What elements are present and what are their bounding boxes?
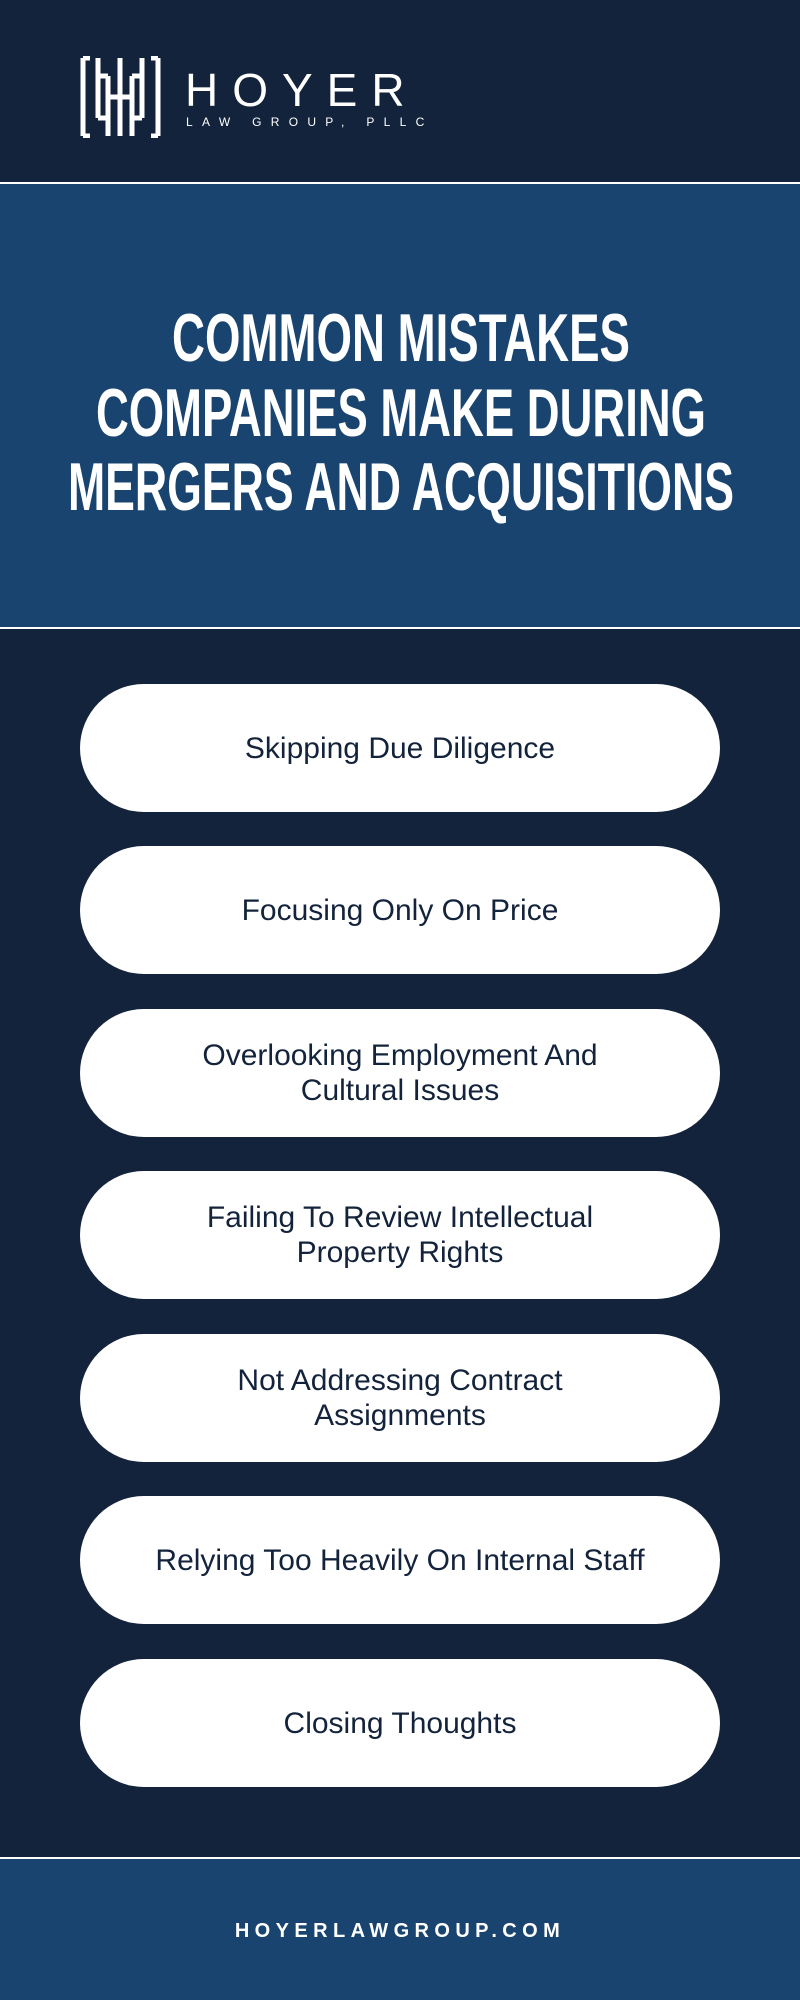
- header logo: [80, 56, 434, 138]
- item 6: [80, 1496, 720, 1624]
- item 6: Relying Too Heavily On Internal Staff: [155, 1544, 645, 1576]
- header logo: LAW GROUP, PLLC: [186, 115, 434, 129]
- item 3: [80, 1009, 720, 1137]
- item 7: Closing Thoughts: [284, 1706, 516, 1740]
- icon: logo mark: [83, 58, 158, 136]
- item 5: Assignments: [314, 1399, 486, 1432]
- item 1: [80, 684, 720, 812]
- item 5: [80, 1334, 720, 1462]
- footer: [0, 1859, 800, 2000]
- item 2: [80, 846, 720, 974]
- item 3: Overlooking Employment And: [202, 1039, 598, 1072]
- website: HOYERLAWGROUP.COM: [235, 1920, 565, 1942]
- brand name: HOYER: [185, 64, 419, 116]
- list of mistakes: [80, 684, 720, 1787]
- item 3: Cultural Issues: [301, 1074, 499, 1107]
- item 1: Skipping Due Diligence: [245, 732, 555, 764]
- item 4: Property Rights: [297, 1236, 503, 1269]
- title: [68, 300, 734, 525]
- item 4: [80, 1171, 720, 1299]
- item 7: [80, 1659, 720, 1787]
- item 4: Failing To Review Intellectual: [207, 1201, 593, 1234]
- title band: [0, 184, 800, 627]
- item 2: Focusing Only On Price: [242, 894, 558, 926]
- item 5: Not Addressing Contract: [237, 1364, 563, 1397]
